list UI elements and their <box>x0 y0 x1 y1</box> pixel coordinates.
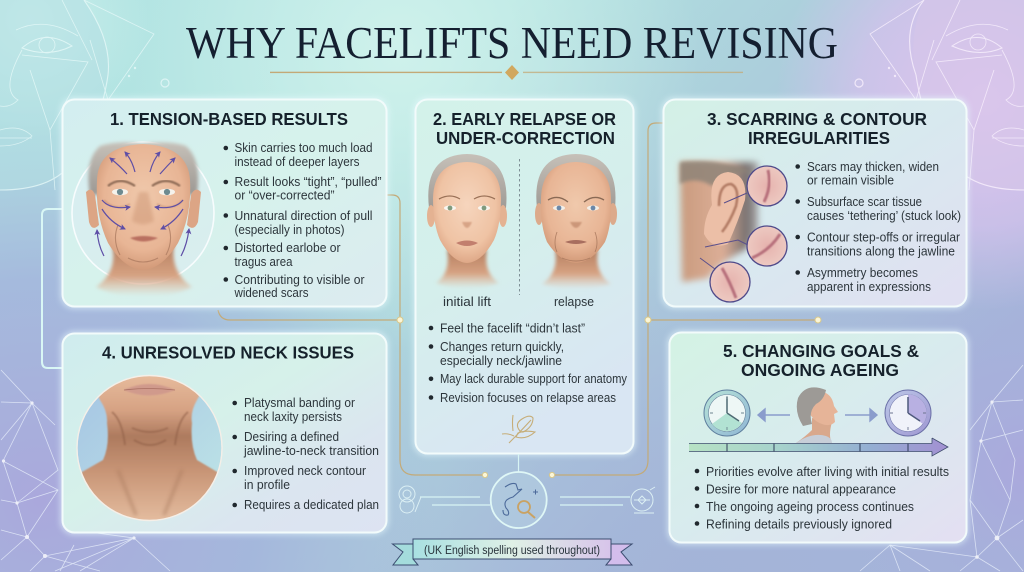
bullets 2: Changes return quickly, <box>440 340 564 354</box>
image: ear with scar close-ups <box>680 161 789 304</box>
caption: initial lift: initial lift <box>443 295 492 309</box>
bullets 3: causes ‘tethering’ (stuck look) <box>807 209 961 223</box>
panel 2: early relapse or under-correction <box>416 100 634 454</box>
bullets 1: Skin carries too much load <box>234 141 372 155</box>
bullets 1 <box>224 141 382 300</box>
arrow: right <box>845 409 877 421</box>
bullets 4: Improved neck contour <box>244 464 366 478</box>
bullets 5: Priorities evolve after living with initial results <box>706 465 949 479</box>
bullets 3: apparent in expressions <box>807 280 931 294</box>
bullets 4: neck laxity persists <box>244 410 342 424</box>
panel 1: tension-based results <box>62 100 386 306</box>
bullets 5: Refining details previously ignored <box>706 518 892 532</box>
title: WHY FACELIFTS NEED REVISING <box>186 18 838 68</box>
panel 3: scarring and contour irregularities <box>664 100 966 306</box>
image: relapse face <box>535 154 617 289</box>
decoration: right face line art <box>855 0 1024 190</box>
bullets 3: transitions along the jawline <box>807 244 955 258</box>
scar close-up 2 <box>745 224 789 268</box>
heading 4: 4. UNRESOLVED NECK ISSUES <box>102 342 354 362</box>
panel glows <box>60 97 969 545</box>
scar close-up 1 <box>745 164 789 208</box>
decoration: left face line art <box>0 0 169 190</box>
bullets 5: The ongoing ageing process continues <box>706 500 914 514</box>
ribbon text: (UK English spelling used throughout) <box>424 543 600 557</box>
scar close-up 3 <box>708 260 752 304</box>
icon: left outline ornament <box>399 486 421 513</box>
heading 3: 3. SCARRING & CONTOUR <box>707 109 927 129</box>
decoration: right polygon network <box>860 365 1023 571</box>
bullets 1: instead of deeper layers <box>234 155 360 169</box>
icon: leaf sprig <box>502 415 535 443</box>
heading 2: 2. EARLY RELAPSE OR <box>433 109 616 129</box>
bullets 2: especially neck/jawline <box>440 354 562 368</box>
bullets 4: Desiring a defined <box>244 430 339 444</box>
connector: pale lines to central icon <box>420 454 630 505</box>
bullets 3: or remain visible <box>807 174 894 188</box>
image: older face with tension arrows <box>72 142 214 296</box>
bullets 1: Distorted earlobe or <box>234 241 340 255</box>
panel 5: changing goals and ongoing ageing <box>670 332 966 542</box>
bullets 1: (especially in photos) <box>234 223 344 237</box>
image: older woman in profile <box>796 387 838 443</box>
bullets 4: Requires a dedicated plan <box>244 498 379 512</box>
heading 5 <box>723 341 919 380</box>
connector: teal link between panels 1 and 4 <box>42 209 64 368</box>
heading 5: ONGOING AGEING <box>741 360 899 380</box>
bullets 1: or “over-corrected” <box>234 188 334 202</box>
image: neck close-up in circle <box>75 372 224 525</box>
bullets 4: jawline-to-neck transition <box>243 444 379 458</box>
bullets 1: Result looks “tight”, “pulled” <box>234 175 382 189</box>
ribbon: UK English note <box>392 539 632 565</box>
bullets 1: Contributing to visible or <box>234 273 364 287</box>
bullets 2: Revision focuses on relapse areas <box>440 391 616 405</box>
bullets 5 <box>695 465 949 532</box>
bullets 3 <box>795 160 961 294</box>
icon: clock, green <box>704 390 750 436</box>
divider <box>518 159 520 295</box>
bullets 2 <box>429 322 628 405</box>
heading 2: UNDER-CORRECTION <box>436 128 615 148</box>
connector nodes <box>397 317 821 478</box>
heading 1: 1. TENSION-BASED RESULTS <box>110 109 348 129</box>
bullets 1: Unnatural direction of pull <box>234 209 372 223</box>
tension arrows <box>97 152 189 256</box>
caption: relapse: relapse <box>554 295 594 309</box>
bullets 3: Contour step-offs or irregular <box>807 230 960 244</box>
decoration: left polygon network <box>1 370 170 571</box>
heading 2 <box>433 109 616 148</box>
icon: central face and magnifier <box>491 472 547 528</box>
bullets 2: Feel the facelift “didn’t last” <box>440 322 585 336</box>
bullets 2: May lack durable support for anatomy <box>440 372 628 386</box>
bullets 3: Scars may thicken, widen <box>807 160 939 174</box>
icon: right outline ornament <box>631 487 655 513</box>
icon: clock, purple <box>885 390 931 436</box>
bullets 5: Desire for more natural appearance <box>706 482 896 496</box>
bullets 3: Asymmetry becomes <box>807 266 918 280</box>
bullets 3: Subsurface scar tissue <box>807 195 922 209</box>
heading 3: IRREGULARITIES <box>748 128 890 148</box>
panel 4: unresolved neck issues <box>62 334 386 532</box>
timeline arrow <box>689 438 948 456</box>
image: initial lift face <box>427 154 507 288</box>
bullets 4 <box>232 396 379 512</box>
bullets 4: Platysmal banding or <box>244 396 355 410</box>
heading 3 <box>707 109 927 148</box>
heading 5: 5. CHANGING GOALS & <box>723 341 919 361</box>
bullets 1: widened scars <box>234 286 308 300</box>
connector: gold lines <box>218 123 818 475</box>
title divider with diamond <box>270 65 743 80</box>
arrow: left <box>758 409 790 421</box>
bullets 1: tragus area <box>234 255 292 269</box>
bullets 4: in profile <box>244 478 290 492</box>
